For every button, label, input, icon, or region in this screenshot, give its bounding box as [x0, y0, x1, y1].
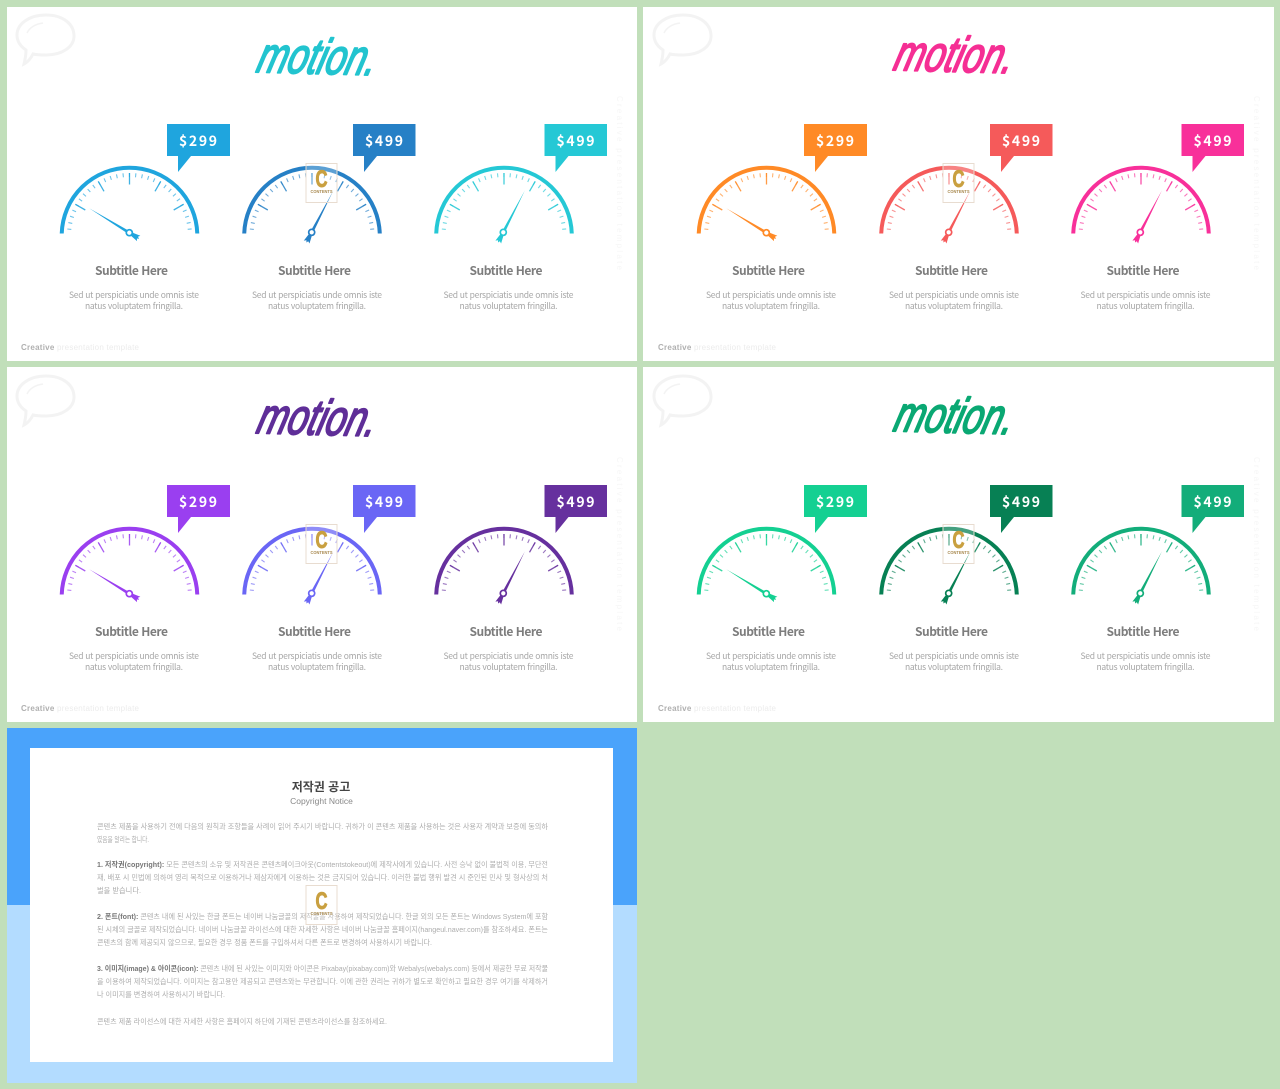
gauge 2: Subtitle Here — [278, 623, 351, 640]
gauge 3 — [1073, 485, 1244, 673]
gauge 1: Subtitle Here — [732, 623, 805, 640]
gauge 2 — [881, 485, 1052, 673]
title: motion. — [889, 386, 1022, 445]
copyright body text: 콘텐츠 제품 라이선스에 대한 자세한 사항은 홈페이지 하단에 기재된 콘텐츠라이선스를 참조하세요. — [97, 1016, 387, 1026]
gauge 3: Subtitle Here — [1106, 623, 1180, 640]
gauge 1 — [62, 485, 230, 673]
copyright subheading: Copyright Notice — [290, 796, 353, 806]
gauge 3: Sed ut perspiciatis unde omnis iste — [444, 650, 574, 662]
copyright body text: 3. 이미지(image) & 아이콘(icon): 콘텐츠 내에 된 사있는 이미지와 아이콘은 Pixabay(pixabay.com)와 Webalys(webalys.com) 등에서 제공한 무료 저작물 — [97, 963, 548, 973]
gauge 2: Sed ut perspiciatis unde omnis iste — [252, 289, 382, 301]
gauge 2: Subtitle Here — [278, 262, 351, 279]
gauge 3: Sed ut perspiciatis unde omnis iste — [1080, 289, 1211, 301]
title: motion. — [252, 27, 385, 86]
copyright body text: 된 시체의 글꼴로 제작되었습니다. 네이버 나눔글꼴 라이선스에 대한 자세한 사항은 네이버 나눔글꼴 홈페이지(hangeul.naver.com)를 참조하세요. 폰트는 — [97, 924, 548, 934]
title: motion. — [889, 25, 1022, 84]
gauge 1 — [62, 124, 230, 312]
gauge 1: $299 — [179, 492, 217, 512]
copyright body text: 콘텐츠 제품을 사용하기 전에 다음의 원칙과 조항들을 사례이 읽어 주시기 바랍니다. 귀하가 이 콘텐츠 제품을 사용하는 것은 사용자 계약과 보증에 동의하 — [97, 821, 548, 831]
gauge 3: natus voluptatem fringilla. — [460, 661, 558, 673]
watermark stamp — [943, 524, 974, 564]
gauge 2: $499 — [1002, 131, 1040, 151]
gauge 1: natus voluptatem fringilla. — [85, 300, 183, 312]
copyright heading: 저작권 공고 — [292, 779, 350, 794]
gauge 2: natus voluptatem fringilla. — [268, 300, 366, 312]
gauge 2: $499 — [1002, 492, 1040, 512]
icon: speech bubble — [654, 376, 711, 425]
gauge 1: Sed ut perspiciatis unde omnis iste — [706, 650, 836, 662]
gauge 2 — [881, 124, 1052, 312]
gauge 1: $299 — [816, 131, 854, 151]
gauge 2: Sed ut perspiciatis unde omnis iste — [889, 650, 1019, 662]
gauge 3: natus voluptatem fringilla. — [460, 300, 558, 312]
copyright body text: 콘텐츠의 함께 제공되지 않으므로, 필요한 경우 정품 폰트를 구입하셔서 다른 폰트로 변경하여 사용하시기 바랍니다. — [97, 937, 432, 947]
gauge 2: $499 — [365, 492, 403, 512]
gauge 1: natus voluptatem fringilla. — [722, 300, 820, 312]
panel: copyright notice slide — [7, 728, 637, 1083]
gauge 3 — [436, 124, 607, 312]
copyright body text: 였음을 알리는 합니다. — [97, 834, 149, 844]
copyright body text: 나 이미지를 변경하여 사용하시기 바랍니다. — [97, 989, 225, 999]
watermark stamp — [306, 886, 337, 924]
gauge 3: Subtitle Here — [1106, 262, 1180, 279]
gauge 2: natus voluptatem fringilla. — [268, 661, 366, 673]
title: motion. — [252, 388, 385, 447]
gauge 2: Sed ut perspiciatis unde omnis iste — [889, 289, 1019, 301]
panel: green slide — [643, 367, 1274, 722]
copyright body text: 재, 배포 시 민법에 의하여 영리 목적으로 이용하거나 제삼자에게 이용하는 것은 금지되어 있습니다. 이러한 불법 행위 발견 시 준인된 민사 및 형사상의 처 — [97, 872, 548, 882]
side caption: Creative presentation template — [615, 457, 624, 632]
gauge 1: $299 — [179, 131, 217, 151]
copyright body text: 벌을 받습니다. — [97, 885, 141, 895]
icon: speech bubble — [17, 376, 74, 425]
gauge 2: Subtitle Here — [915, 623, 988, 640]
gauge 1: Sed ut perspiciatis unde omnis iste — [706, 289, 836, 301]
footer: Creative presentation template — [21, 343, 140, 352]
gauge 2: natus voluptatem fringilla. — [905, 300, 1003, 312]
gauge 3: Sed ut perspiciatis unde omnis iste — [444, 289, 574, 301]
gauge 3 — [1073, 124, 1244, 312]
footer: Creative presentation template — [21, 704, 140, 713]
gauge 1 — [699, 485, 867, 673]
gauge 1 — [699, 124, 867, 312]
gauge 3: Sed ut perspiciatis unde omnis iste — [1080, 650, 1211, 662]
gauge 3: $499 — [556, 131, 594, 151]
gauge 3: $499 — [556, 492, 594, 512]
footer: Creative presentation template — [658, 343, 777, 352]
copyright body text: 을 이용하여 제작되었습니다. 이미지는 참고용만 제공되고 콘텐츠와는 무관합니다. 이에 관한 권리는 귀하가 별도로 확인하고 필요한 경우 여기를 삭제하거 — [97, 976, 548, 986]
gauge 1: Subtitle Here — [95, 623, 168, 640]
gauge 3: natus voluptatem fringilla. — [1096, 300, 1194, 312]
gauge 2: Subtitle Here — [915, 262, 988, 279]
gauge 1: Subtitle Here — [732, 262, 805, 279]
copyright body text: 1. 저작권(copyright): 모든 콘텐츠의 소유 및 저작권은 콘텐츠메이크아웃(Contentstokeout)에 제작사에게 있습니다. 사전 승낙 없이 불법적 이용, 무단전 — [97, 859, 548, 869]
copyright body text — [97, 821, 548, 1026]
side caption: Creative presentation template — [1252, 457, 1261, 632]
gauge 1: Sed ut perspiciatis unde omnis iste — [69, 650, 199, 662]
gauge 2 — [244, 124, 416, 312]
gauge 2: $499 — [365, 131, 403, 151]
gauge 1: $299 — [816, 492, 854, 512]
gauge 2: natus voluptatem fringilla. — [905, 661, 1003, 673]
watermark stamp — [306, 524, 337, 564]
watermark stamp — [943, 164, 974, 202]
gauge 3: Subtitle Here — [470, 262, 543, 279]
side caption: Creative presentation template — [1252, 96, 1261, 271]
gauge 3: Subtitle Here — [470, 623, 543, 640]
gauge 3: $499 — [1194, 131, 1232, 151]
watermark stamp — [306, 164, 337, 202]
gauge 1: natus voluptatem fringilla. — [722, 661, 820, 673]
copyright body text: 2. 폰트(font): 콘텐츠 내에 된 사있는 한글 폰트는 네이버 나눔글꼴의 저작물을 사용하여 제작되었습니다. 한글 외의 모든 폰트는 Windows System에 포함 — [97, 911, 548, 921]
gauge 1: natus voluptatem fringilla. — [85, 661, 183, 673]
gauge 1: Sed ut perspiciatis unde omnis iste — [69, 289, 199, 301]
gauge 3: natus voluptatem fringilla. — [1096, 661, 1194, 673]
panel: purple slide — [7, 367, 637, 722]
gauge 3 — [436, 485, 607, 673]
gauge 2: Sed ut perspiciatis unde omnis iste — [252, 650, 382, 662]
footer: Creative presentation template — [658, 704, 777, 713]
side caption: Creative presentation template — [615, 96, 624, 271]
gauge 1: Subtitle Here — [95, 262, 168, 279]
panel: orange pink slide — [643, 7, 1274, 361]
gauge 2 — [244, 485, 416, 673]
icon: speech bubble — [654, 15, 711, 64]
gauge 3: $499 — [1194, 492, 1232, 512]
icon: speech bubble — [17, 15, 74, 64]
panel: cyan slide — [7, 7, 637, 361]
